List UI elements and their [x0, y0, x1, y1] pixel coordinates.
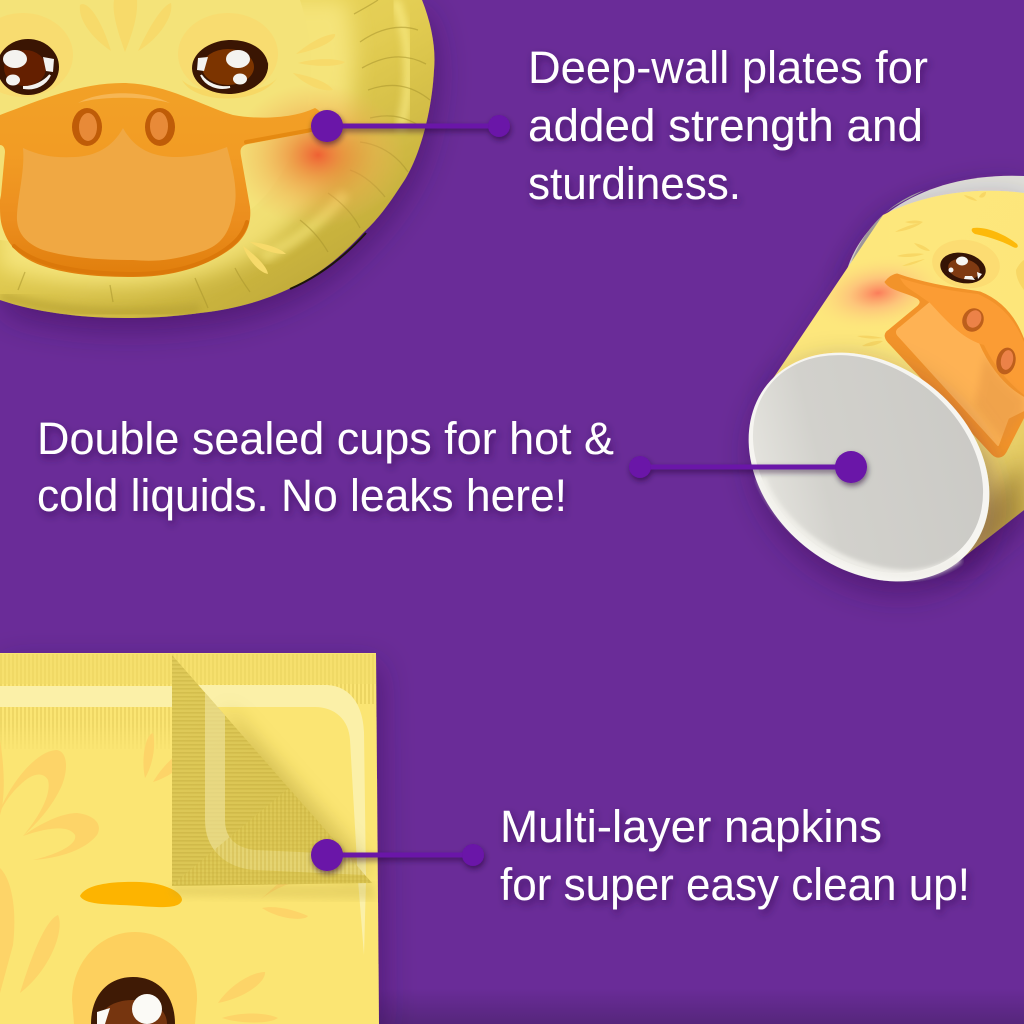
- text: plates: sturdiness.: [528, 158, 741, 209]
- napkin fold: [172, 655, 376, 900]
- cup: [740, 175, 1024, 604]
- napkin body: [0, 653, 379, 1024]
- text: plates: [528, 42, 928, 209]
- plate beak lower bill: [17, 128, 236, 261]
- callout: napkins pointer: [311, 839, 484, 871]
- text: cups: [37, 413, 614, 521]
- cup body: [770, 191, 1024, 560]
- plate left eye: [0, 13, 73, 97]
- napkin petals: [0, 733, 308, 1022]
- plate beak left edge: [0, 145, 5, 200]
- text: plates: Deep-wall plates for: [528, 42, 928, 93]
- plate dark under-edge: [290, 233, 366, 289]
- plate rim highlights: [395, 0, 408, 130]
- napkin eye: [72, 932, 197, 1024]
- plate body: [0, 0, 434, 318]
- nostril right: [145, 108, 175, 146]
- plate beak sheen: [78, 93, 170, 103]
- fold shadow: [225, 705, 372, 875]
- text: plates: added strength and: [528, 100, 923, 151]
- plate: [0, 0, 434, 318]
- cup lower shading: [975, 460, 1024, 560]
- plate beak right-arm lower edge: [244, 128, 312, 144]
- fold flap stripe: [215, 680, 365, 865]
- cup rim: [845, 176, 1024, 300]
- fold lower ribbing: [195, 789, 368, 884]
- napkin: [0, 653, 379, 1024]
- plate feather marks: [80, 0, 345, 274]
- cup beak: [885, 274, 1024, 457]
- callout: cups pointer: [629, 451, 867, 483]
- text: cups: Double sealed cups for hot &: [37, 413, 614, 464]
- cup nostril lower: [996, 348, 1016, 374]
- napkin white stripe: [0, 686, 174, 707]
- callout: plates pointer: [311, 110, 510, 142]
- napkin ribbed border: [0, 684, 170, 736]
- text: napkins: Multi-layer napkins: [500, 801, 882, 852]
- plate rim lower shade: [0, 296, 200, 313]
- text: cups: cold liquids. No leaks here!: [37, 470, 567, 521]
- plate beak: [0, 83, 328, 277]
- plate rim creases: [18, 0, 430, 308]
- plate inner face: [0, 0, 353, 285]
- text: napkins: for super easy clean up!: [500, 859, 970, 910]
- fold flap: [172, 655, 372, 886]
- plate beak bottom edge: [14, 222, 247, 274]
- cup eye: [932, 240, 1000, 288]
- cup beak lower bill: [897, 303, 1024, 445]
- cup base: [703, 305, 1024, 629]
- text: napkins: [500, 801, 970, 910]
- cup eyebrow: [972, 228, 1018, 248]
- cup beak dark shade: [977, 363, 1024, 436]
- plate cheek blush: [242, 93, 395, 212]
- plate right eye: [178, 13, 278, 99]
- cup nostril upper: [962, 308, 984, 332]
- cup blush: [823, 266, 926, 320]
- cup beak upper shade: [900, 278, 1024, 395]
- nostril left: [72, 108, 102, 146]
- napkin eyebrow: [80, 882, 182, 907]
- cup feather marks: [857, 192, 1024, 346]
